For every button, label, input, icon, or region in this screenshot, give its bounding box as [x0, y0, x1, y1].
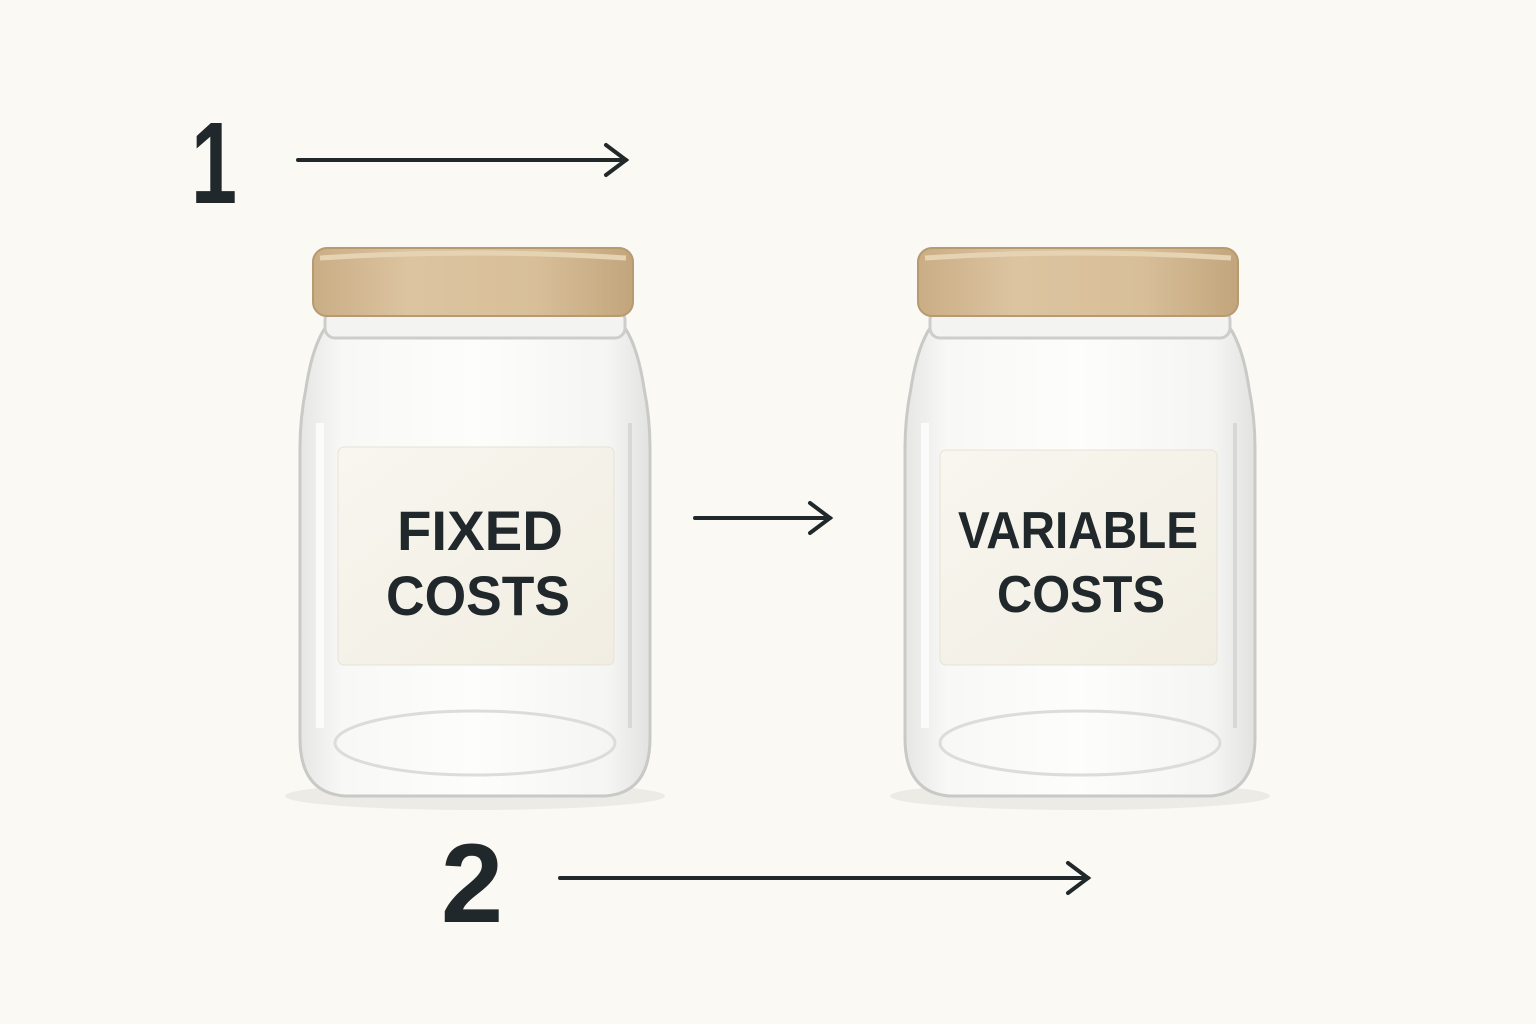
label: fixed costs: FIXED	[397, 499, 563, 562]
number 2: 2	[441, 821, 503, 946]
label: variable costs	[940, 450, 1217, 665]
label: fixed costs	[338, 447, 614, 665]
label: fixed costs: COSTS	[386, 564, 570, 627]
label: variable costs: VARIABLE	[958, 502, 1198, 560]
jar: fixed costs	[285, 248, 665, 810]
label: variable costs: COSTS	[997, 566, 1165, 624]
arrow 1	[298, 145, 626, 175]
arrow 2	[560, 863, 1088, 893]
jar: variable costs	[890, 248, 1270, 810]
arrow middle	[695, 503, 830, 533]
number 1: 1	[191, 98, 237, 228]
